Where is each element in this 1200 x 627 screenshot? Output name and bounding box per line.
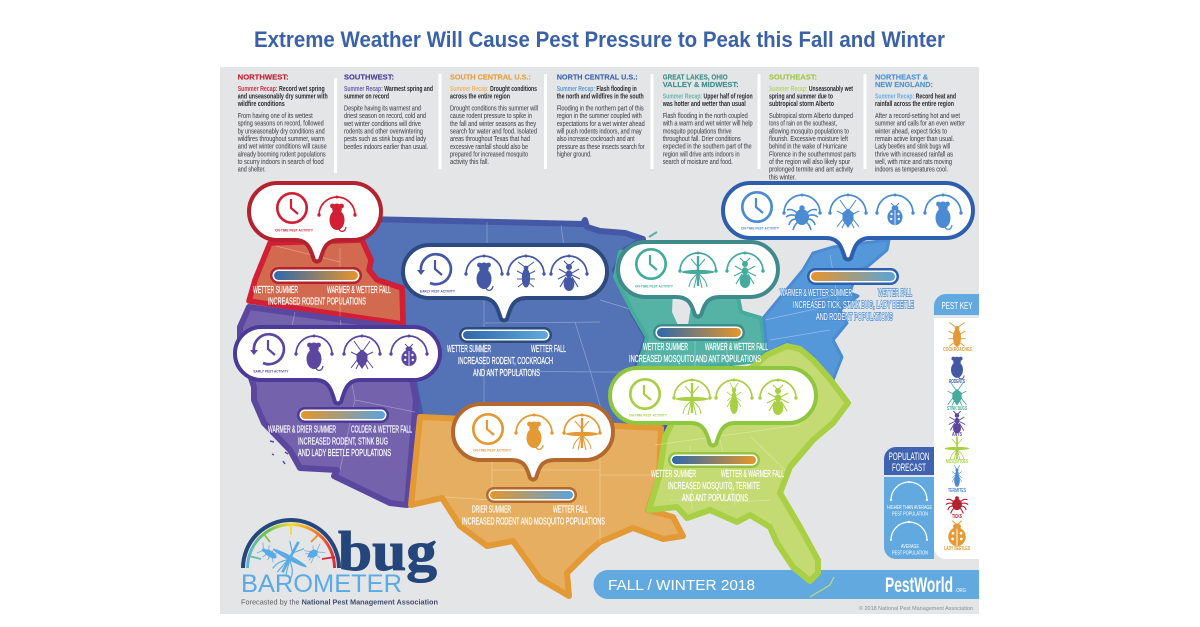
- bubble: southwest: [235, 327, 440, 404]
- labels: southwest: WARMER & DRIER SUMMER: [268, 424, 336, 436]
- key: mosquitoes: [945, 436, 969, 465]
- panel: southwest text: pests such as stink bugs and lady: [344, 136, 426, 143]
- bubble: northeast: [723, 183, 973, 260]
- panel: south central text: Summer Recap: Drought conditions: [450, 86, 537, 93]
- copyright: © 2018 National Pest Management Association: [859, 605, 973, 612]
- panel: southeast text: SOUTHEAST:: [769, 72, 817, 82]
- labels: northeast: AND RODENT POPULATIONS: [816, 312, 893, 323]
- labels: great lakes: [629, 342, 768, 365]
- panel: southeast text: Florence in the southernmost parts: [769, 151, 856, 158]
- labels: north central: WETTER FALL: [531, 344, 566, 355]
- panel: northeast text: NEW ENGLAND:: [875, 80, 933, 89]
- panel: northeast text: thrive with increased rainfall as: [875, 151, 953, 158]
- panel: southeast text: tons of rain on the southeast,: [769, 121, 837, 128]
- panel: south central text: cause rodent pressure to spike in: [450, 113, 532, 120]
- panel: southeast text: of the region will also likely spur: [769, 159, 851, 166]
- panel: southeast text: behind in the wake of Hurricane: [769, 144, 847, 151]
- panel: northeast text: Summer Recap: Record heat and: [875, 94, 956, 100]
- gauge: higher than average: [890, 481, 928, 501]
- icon: stink bug gauge: [829, 194, 867, 228]
- gauge: average: [890, 521, 928, 541]
- labels: northeast: [780, 288, 914, 323]
- bubble: great lakes: [618, 242, 778, 316]
- key: mosquitoes: MOSQUITOES: [946, 459, 968, 465]
- map: southwest region: [240, 307, 416, 505]
- labels: southeast: WETTER & WARMER FALL: [721, 469, 784, 480]
- panel: southeast text: flourish. Excessive moisture left: [769, 136, 848, 143]
- panel: north central text: the north and wildfires in the south: [557, 94, 644, 100]
- panel: northeast text: summer and calls for an even wetter: [875, 121, 966, 128]
- labels: northwest: WARMER & WETTER FALL: [327, 285, 391, 296]
- infographic panel: [220, 67, 979, 614]
- panel: southeast text: spring and summer due to: [769, 94, 833, 100]
- title: Extreme Weather Will Cause Pest Pressure to Peak this Fall and Winter: [254, 27, 945, 52]
- panel: northwest text: Summer Recap: Record wet spring: [238, 86, 325, 93]
- banner: fall winter 2018: .ORG: [955, 588, 966, 594]
- icon: early clock: [250, 334, 284, 364]
- panel: great lakes text: Flash flooding in the north coupled: [663, 113, 748, 120]
- panel: southwest text: wet winter conditions will drive: [343, 121, 421, 128]
- panel: great lakes text: [662, 72, 753, 166]
- key: ticks: TICKS: [952, 514, 962, 520]
- panel: north central text: NORTH CENTRAL U.S.:: [557, 72, 638, 82]
- panel: southwest text: SOUTHWEST:: [344, 72, 394, 82]
- forecast bar: southeast: [668, 452, 760, 468]
- panel: great lakes text: VALLEY & MIDWEST:: [663, 80, 739, 89]
- label: ON-TIME PEST ACTIVITY: [741, 226, 779, 230]
- forecast bar: north central: [459, 327, 552, 343]
- labels: northeast: WARMER & WETTER SUMMER: [780, 288, 852, 299]
- panel: northeast text: NORTHEAST &: [875, 72, 928, 82]
- labels: northwest: WETTER SUMMER: [253, 285, 298, 296]
- label: higher than average: HIGHER THAN AVERAGE: [887, 505, 932, 511]
- panel: northwest text: by unseasonably dry conditions and: [238, 128, 325, 135]
- labels: northwest: INCREASED RODENT POPULATIONS: [268, 296, 366, 308]
- label: ON-TIME PEST ACTIVITY: [275, 228, 313, 232]
- icon: rodent gauge: [515, 414, 553, 449]
- panel: great lakes text: GREAT LAKES, OHIO: [663, 72, 728, 82]
- key: ticks: [946, 496, 968, 520]
- panel: northwest text: already booming rodent populations: [238, 151, 326, 158]
- forecast bar: northwest: [270, 267, 362, 284]
- labels: south central: [462, 504, 605, 528]
- icon: on-time clock: [636, 249, 666, 279]
- panel: south central text: activity this fall.: [450, 159, 489, 166]
- icon: rodent gauge: [318, 196, 356, 231]
- key: stink bugs: STINK BUGS: [947, 406, 967, 412]
- panel: north central text: pressure as these insects search for: [557, 144, 645, 151]
- key: rodents: RODENTS: [949, 379, 965, 385]
- icon: on-time clock: [277, 193, 307, 223]
- panel: northwest text: to scurry indoors in search of food: [238, 159, 324, 166]
- panel: northwest text: NORTHWEST:: [238, 72, 289, 82]
- panel: population forecast: POPULATION: [888, 451, 930, 463]
- bubble: south central: [453, 404, 613, 480]
- icon: lady beetle gauge: [876, 194, 914, 225]
- wordmark bug: bug: [338, 521, 437, 583]
- labels: northwest: [253, 285, 391, 308]
- panel: northeast text: winter ahead, expect ticks to: [874, 128, 947, 135]
- label: EARLY PEST ACTIVITY: [254, 368, 289, 374]
- icon: early clock: [417, 254, 451, 284]
- label: pest population: PEST POPULATION: [892, 512, 928, 518]
- key: termites: [948, 465, 966, 494]
- panel: pest key: PEST KEY: [942, 301, 973, 312]
- label: ON-TIME PEST ACTIVITY: [635, 284, 673, 288]
- logo: bug barometer: [241, 520, 438, 606]
- panel: pest key: [934, 294, 979, 559]
- panel: northeast text: well, with mice and rats moving: [874, 159, 952, 166]
- panel: northeast text: [874, 72, 966, 174]
- icon: ant gauge: [726, 252, 764, 288]
- panel: north central text: [556, 72, 645, 158]
- labels: north central: INCREASED RODENT, COCKROACH: [458, 356, 553, 367]
- panel: northeast text: indoors as temperatures cool.: [875, 167, 948, 174]
- panel: southwest text: Despite having its warmest and: [344, 106, 421, 112]
- label: ON-TIME PEST ACTIVITY: [629, 412, 667, 418]
- panel: north central text: also increase cockroach and ant: [557, 136, 635, 143]
- panel: northeast text: rainfall across the entire region: [875, 101, 954, 108]
- panel: south central text: excessive rainfall should also be: [450, 144, 528, 151]
- gauge arc: [243, 520, 339, 568]
- labels: south central: INCREASED RODENT AND MOSQUITO POPULATIONS: [462, 516, 605, 528]
- panel: northwest text: and unseasonably dry summer with: [238, 94, 328, 100]
- labels: great lakes: WARMER & WETTER FALL: [705, 342, 768, 353]
- panel: great lakes text: Summer Recap: Upper half of region: [663, 94, 753, 100]
- banner: fall winter 2018: FALL / WINTER 2018: [608, 578, 755, 594]
- icon: rodent gauge: [295, 335, 333, 370]
- icon: mosquito gauge: [679, 252, 717, 288]
- labels: southwest: AND LADY BEETLE POPULATIONS: [298, 448, 391, 459]
- key: stink bugs: [947, 382, 967, 412]
- label: average pest population: PEST POPULATION: [892, 550, 928, 556]
- panel: southwest text: [343, 72, 433, 151]
- panel: southwest text: beetles indoors earlier than usual.: [344, 144, 428, 151]
- logo bugs: [256, 533, 326, 583]
- panel: great lakes text: was hotter and wetter than usual: [662, 101, 746, 108]
- icon: ant gauge: [759, 379, 797, 415]
- icon: mosquito gauge: [673, 379, 711, 415]
- map: north central region: [362, 219, 671, 431]
- labels: southwest: COLDER & WETTER FALL: [351, 424, 412, 436]
- panel: northeast text: After a record-setting hot and wet: [875, 113, 960, 120]
- panel: north central text: Flooding in the northern part of this: [557, 106, 644, 112]
- panel: south central text: SOUTH CENTRAL U.S.:: [450, 72, 531, 82]
- labels: northeast: INCREASED TICK, STINK BUG, LADY BEETLE: [793, 300, 914, 311]
- labels: great lakes: INCREASED MOSQUITO AND ANT POPULATIONS: [629, 354, 761, 365]
- icon: on-time clock: [742, 192, 772, 222]
- labels: southeast: AND ANT POPULATIONS: [682, 493, 748, 504]
- wordmark barometer: BAROMETER: [241, 570, 402, 598]
- key: ants: [949, 411, 965, 438]
- key: ants: ANTS: [952, 432, 962, 438]
- panel: southwest text: Summer Recap: Warmest spring and: [344, 86, 433, 93]
- panel: north central text: higher ground.: [557, 152, 592, 158]
- icon: termite gauge: [715, 379, 753, 414]
- icon: ant gauge: [550, 255, 588, 291]
- panel: south central text: [450, 72, 538, 166]
- labels: great lakes: WETTER SUMMER: [643, 342, 688, 353]
- panel: great lakes text: with a warm and wet winter will help: [662, 121, 753, 128]
- key: cockroaches: [943, 323, 972, 353]
- panel: south central text: across the entire region: [450, 94, 510, 100]
- panel: southwest text: summer on record: [344, 94, 389, 100]
- labels: north central: AND ANT POPULATIONS: [473, 368, 540, 379]
- icon: rodent gauge: [924, 194, 962, 229]
- panel: great lakes text: expected in the southern part of the: [663, 144, 752, 151]
- labels: north central: [447, 344, 566, 379]
- panel: southeast text: this winter.: [769, 174, 796, 181]
- icon: on-time clock: [473, 414, 503, 444]
- icon: lady beetle gauge: [390, 335, 428, 366]
- panel: southeast text: Summer Recap: Unseasonably wet: [769, 86, 853, 93]
- panel: north central text: Summer Recap: Flash flooding in: [557, 86, 637, 93]
- panel: southwest text: rodents and other overwintering: [344, 128, 423, 136]
- labels: south central: WETTER FALL: [553, 504, 588, 516]
- panel: southeast text: Subtropical storm Alberto dumped: [769, 113, 853, 120]
- panel: northwest text: spring seasons on record, followed: [238, 121, 324, 128]
- panel: great lakes text: mosquito populations thrive: [663, 128, 732, 135]
- map: northeast region: [764, 240, 889, 380]
- panel: southeast text: subtropical storm Alberto: [769, 101, 834, 108]
- labels: southwest: [268, 424, 412, 459]
- forecast bar: northeast: [807, 268, 899, 285]
- icon: stink bug gauge: [343, 335, 381, 369]
- label: ON-TIME PEST ACTIVITY: [473, 448, 511, 452]
- icon: cockroach gauge: [507, 255, 545, 288]
- labels: southwest: INCREASED RODENT, STINK BUG: [298, 436, 388, 448]
- panel: northwest text: and shelter.: [238, 167, 266, 174]
- map: south central region: [411, 417, 683, 596]
- bubble: north central: [403, 245, 607, 320]
- panel: northwest text: wildfire conditions: [237, 101, 285, 108]
- panel: southeast text: prolonged termite and ant activity: [769, 167, 853, 174]
- labels: southeast: INCREASED MOSQUITO, TERMITE: [668, 481, 760, 492]
- panel: great lakes text: region will drive ants indoors in: [663, 151, 740, 158]
- panel: southwest text: driest season on record, cold and: [344, 113, 426, 120]
- panel: great lakes text: throughout fall. Drier conditions: [663, 136, 741, 143]
- panel: south central text: search for water and food. Isolated: [450, 128, 537, 136]
- forecast bar: south central: [486, 487, 577, 503]
- tagline: Forecasted by the National Pest Management Association: [241, 598, 438, 606]
- labels: southeast: [651, 469, 784, 504]
- label: average: AVERAGE: [901, 544, 919, 550]
- panel: north central text: will push rodents indoors, and may: [556, 128, 642, 136]
- forecast bar: great lakes: [653, 324, 745, 341]
- panel: northwest text: wildfires throughout summer, warm: [237, 136, 325, 143]
- panel: northwest text: From having one of its wettest: [238, 113, 313, 120]
- panel: northwest text: and wet winter conditions will cause: [238, 144, 327, 151]
- icon: mosquito gauge: [563, 414, 601, 450]
- panel: great lakes text: search of moisture and food.: [663, 159, 733, 166]
- banner: fall winter 2018: PestWorld: [885, 574, 953, 597]
- panel: north central text: expectations for a wet winter ahead: [557, 121, 645, 128]
- key: lady beetles: [944, 521, 970, 552]
- panel: southeast text: allowing mosquito populations to: [769, 128, 849, 135]
- map: southeast region: [649, 346, 848, 597]
- panel: northeast text: remain active longer than usual.: [875, 136, 954, 143]
- icon: on-time clock: [630, 379, 660, 409]
- panel: population forecast: FORECAST: [892, 462, 926, 474]
- panel: population forecast: [884, 447, 934, 559]
- label: EARLY PEST ACTIVITY: [420, 288, 455, 294]
- panel: northeast text: Lady beetles and stink bugs will: [875, 144, 950, 151]
- panel: south central text: the fall and winter seasons as they: [450, 121, 536, 128]
- panel: south central text: prepared for increased mosquito: [450, 152, 528, 158]
- labels: northeast: WETTER FALL: [878, 288, 912, 299]
- key: lady beetles: LADY BEETLES: [944, 546, 970, 552]
- panel: south central text: areas throughout Texas that had: [450, 136, 530, 143]
- icon: tick gauge: [783, 194, 821, 230]
- map: great lakes region: [615, 232, 765, 371]
- key: termites: TERMITES: [948, 488, 966, 494]
- labels: southeast: WETTER SUMMER: [651, 469, 696, 480]
- panel: southeast text: [769, 72, 856, 181]
- bubble: northwest: [249, 183, 381, 262]
- banner: fall winter 2018: [594, 570, 979, 599]
- panel: south central text: Drought conditions this summer will: [450, 106, 538, 112]
- key: rodents: [949, 357, 965, 385]
- labels: north central: WETTER SUMMER: [447, 344, 491, 355]
- icon: rodent gauge: [465, 255, 503, 290]
- panel: north central text: region in the summer coupled with: [557, 113, 642, 120]
- panel: northwest text: [237, 72, 328, 174]
- forecast bar: southwest: [297, 407, 389, 423]
- labels: south central: DRIER SUMMER: [472, 504, 511, 516]
- key: cockroaches: COCKROACHES: [943, 347, 972, 353]
- map: northwest region: [249, 240, 403, 324]
- bubble: southeast: [610, 368, 816, 446]
